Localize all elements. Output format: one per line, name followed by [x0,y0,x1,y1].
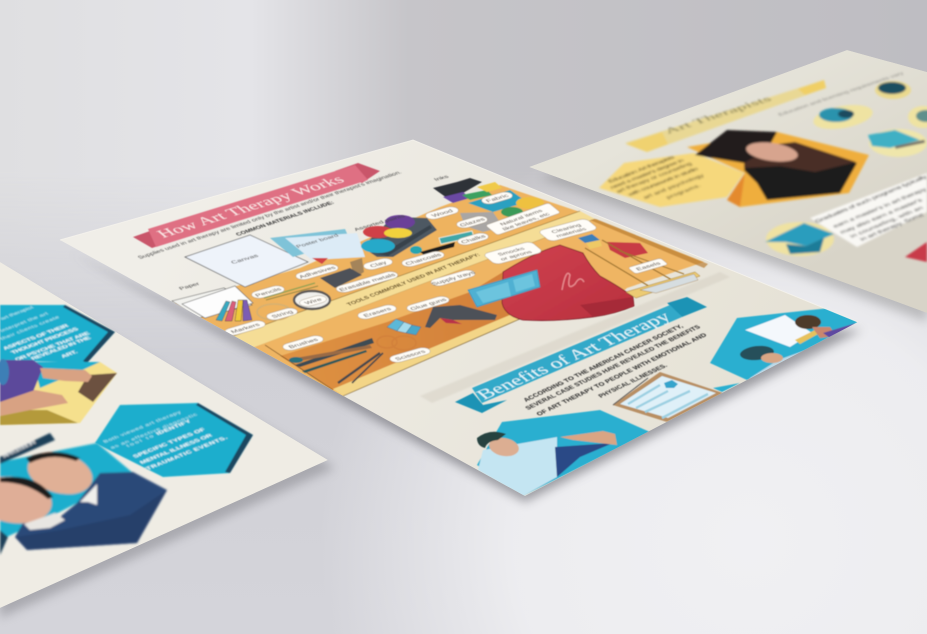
label: glazes [454,215,490,229]
label: markers: Markers [230,323,262,334]
label: string [264,307,300,321]
panel: right page (art therapists) [529,50,927,322]
label: easels [628,258,668,274]
text hexagon: aspects of thought: art therapist [0,305,35,321]
lesson label [0,433,55,464]
banner: benefits of art therapy: Benefits of Art Therapy [472,308,675,403]
icon: yellow badge [908,106,927,128]
text box: graduates of MA programs [810,173,927,247]
item: chalks [439,231,474,244]
label: charcoals [399,250,447,268]
text hexagon: diagnostic tool: SPECIFIC TYPES OF [132,427,207,459]
label: cleaning materials: materials [555,227,588,239]
label: clay: Clay [369,260,389,269]
item: poster board [270,229,365,260]
banner: how art therapy works: How Art Therapy Works [153,173,348,240]
label: scissors: Scissors [394,349,428,362]
text hexagon: diagnostic tool: Both viewed art therapy [102,411,183,444]
text box: graduates of MA programs: in counseling, with an [849,206,925,239]
label: glue guns: Glue guns [409,297,449,311]
plain item captions: Inks [433,174,451,182]
label: fabric: Fabric [485,193,511,203]
item: easel [585,240,700,298]
text hexagon: aspects of thought: THOUGHT PROCESS [10,327,81,355]
label: adhesives [293,263,341,281]
label: scissors [387,346,433,364]
heading: art therapists banner: Art Therapists [661,94,775,136]
shelf: tools [254,218,708,397]
text hexagon: diagnostic tool: MENTAL ILLNESS OR [139,433,214,465]
body text: benefits: ACCORDING TO THE AMERICAN CANCER SOCIETY, [522,323,685,403]
item: scissors [337,352,384,384]
body text: benefits [522,323,709,417]
panel: left page (lesson hexagons) [0,262,335,618]
text hexagon: education [599,153,744,207]
illustration hexagon: art session [710,308,858,382]
lesson label: ART LESSON [1,440,38,459]
label: natural items: like leaves, etc [501,212,552,232]
item: smock backpack [502,245,634,321]
icon: dark badge [875,81,911,99]
item: erasers [387,319,421,335]
label: markers [222,319,268,337]
heading: art therapists banner [625,80,826,152]
label: erasable metals: Erasable metals [338,273,398,292]
intro text: Supplies used in art therapy are limited only by the artist and/or their therapist's imagination. [137,170,404,260]
item: glue gun [425,305,497,328]
label: smocks or aprons [482,241,544,265]
text hexagon: aspects of thought: ART. [60,350,80,359]
plain item captions: Poster board [295,233,341,249]
illustration hexagon: person drawing [0,359,117,425]
label: clay [361,257,395,271]
label: cleaning materials [537,218,599,242]
text hexagon: diagnostic tool [95,403,253,477]
caption text line: Education and licensing requirements vary [777,72,905,117]
photo hexagon: graduate portrait [687,130,869,207]
label: glue guns [404,295,452,313]
label: natural items [485,203,561,235]
label: string: String [270,310,295,319]
plain item captions: Assorted paints [353,214,408,232]
label: pencils: Pencils [254,287,284,298]
text hexagon: aspects of thought: their clients create [0,316,61,341]
item: paper sheets [172,286,253,318]
text hexagon: diagnostic tool: IDENTIFY [155,419,193,436]
plain item captions: Paper [178,282,202,291]
hexagon sliver [713,383,740,392]
label: fabric [479,191,515,205]
body text: benefits: OF ART THERAPY TO PEOPLE WITH EMOTIONAL AND [535,332,709,417]
section shadow [420,272,730,403]
label: smocks or aprons: Smocks [496,246,527,257]
label: natural items: Natural items [499,209,544,227]
subheading: common materials: COMMON MATERIALS INCLUDE: [235,201,336,237]
page shadow [70,252,862,502]
text hexagon: education: need a master's degree in [609,158,686,190]
icon: palette badge [812,104,874,130]
label: smocks or aprons: or aprons [499,250,534,262]
label: supply trays: Supply trays [430,270,478,287]
label: chalks: Chalks [460,234,488,245]
label: charcoals: Charcoals [404,253,444,266]
item: charcoal [420,242,455,255]
label: brushes [280,334,326,352]
text hexagon: diagnostic tool: tool to [125,435,155,448]
item: supply tray [468,270,540,307]
label: wire: Wire [304,297,324,306]
label: wire [297,294,329,308]
item: cleaning materials [578,234,648,258]
text hexagon: education: art therapy or counseling [615,161,694,194]
illustration: clipboard [613,372,723,422]
text box: graduates of MA programs: may also earn a master's [839,198,925,235]
item: markers [216,300,252,321]
text hexagon: aspects of thought [0,305,115,363]
text box: graduates of MA programs: earn a master's in art therapy [832,187,927,229]
text hexagon: aspects of thought: OR PSYCHE THAT ARE [14,331,92,362]
text hexagon: aspects of thought: ASPECTS OF THEIR [2,323,71,351]
text hexagon: aspects of thought: REVEALED IN THE [30,335,93,361]
label: erasers [355,304,399,320]
text hexagon: aspects of thought: interpret the art [0,312,50,333]
label: erasers: Erasers [362,307,394,318]
item: adhesives [312,258,364,288]
illustration hexagon: seated man [477,410,650,496]
label: pencils [249,284,287,300]
band: tools heading [228,211,595,350]
icon: graduation cap [765,222,834,256]
text hexagon: education: art and psychology [642,173,707,200]
label: glazes: Glazes [459,217,487,228]
body text: benefits: SEVERAL CASE STUDIES HAVE REVEALED THE BENEFITS [524,324,702,411]
shelf: materials [170,185,580,340]
item: brushes [289,338,374,373]
item: assorted paints [361,215,437,257]
text box: graduates of MA programs: in art therapy. Some [859,212,926,242]
label: cleaning materials: Cleaning [550,223,583,234]
text hexagon: education: Education: Art therapists [607,155,677,184]
label: wood [423,205,461,221]
material and tool labels [222,191,668,364]
plain item captions: Canvas [230,254,261,265]
label: easels: Easels [635,261,663,272]
item: canvas [185,235,308,287]
label: wood: Wood [431,209,455,218]
label: brushes: Brushes [287,337,321,349]
icon: teal people badge [868,129,927,157]
text hexagon: education: with coursework in studio [626,167,701,197]
label: chalks [455,232,491,246]
text hexagon: education: programs. [665,183,703,200]
plain item captions [178,174,451,291]
panel: main page (how art therapy works) [60,140,862,502]
text hexagon: diagnostic tool: as an effective diagnostic [109,413,199,450]
text box: graduates of MA programs: Graduates of such programs typically [814,175,927,224]
band: tools heading: TOOLS COMMONLY USED IN ART THERAPY: [346,253,482,307]
label: adhesives: Adhesives [298,265,338,280]
text hexagon: diagnostic tool: TRAUMATIC EVENTS. [145,436,229,471]
portrait hexagon: two founders [0,443,167,555]
item: wire and string [257,283,330,320]
page edge highlight [60,140,858,322]
red accent shape [905,242,927,262]
body text: benefits: PHYSICAL ILLNESSES. [597,363,669,399]
item: inks and markers group [433,178,544,217]
item: glazes [460,212,503,232]
